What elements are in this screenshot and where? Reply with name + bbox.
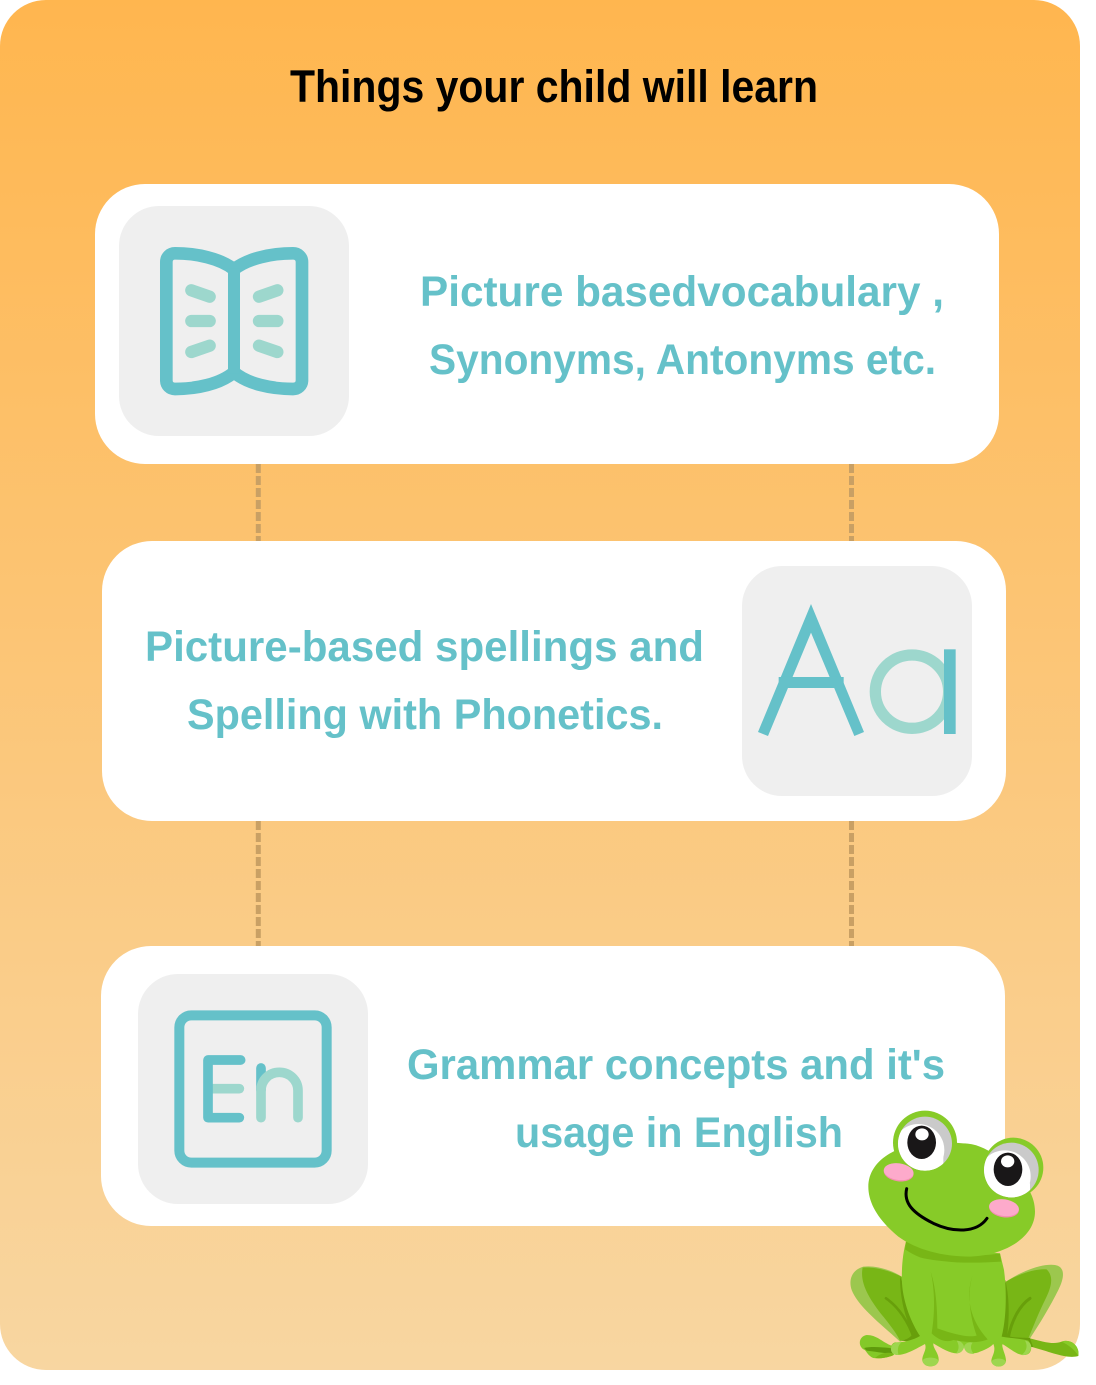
text: spellings [145,623,704,739]
title: Things your child will learn [290,61,818,112]
text: vocabulary: Picture basedvocabulary , [420,268,944,316]
panel: vocabulary card [95,184,999,464]
text: vocabulary: Synonyms, Antonyms etc. [429,336,936,384]
text: vocabulary [420,268,944,384]
text: grammar: Grammar concepts and it's [407,1041,945,1089]
icon: frog [850,1111,1079,1367]
text: spellings: Spelling with Phonetics. [187,691,663,739]
connector: dashed lines top [258,464,852,541]
icon tile: book [119,206,349,436]
icon tile: En [138,974,368,1204]
panel: grammar card [101,946,1005,1226]
panel: spellings card [102,541,1006,821]
text: spellings: Picture-based spellings and [145,623,704,671]
icon tile: Aa [742,566,972,796]
connector: dashed lines bottom [258,821,852,946]
text: grammar [407,1041,945,1157]
text: grammar: usage in English [515,1109,843,1157]
